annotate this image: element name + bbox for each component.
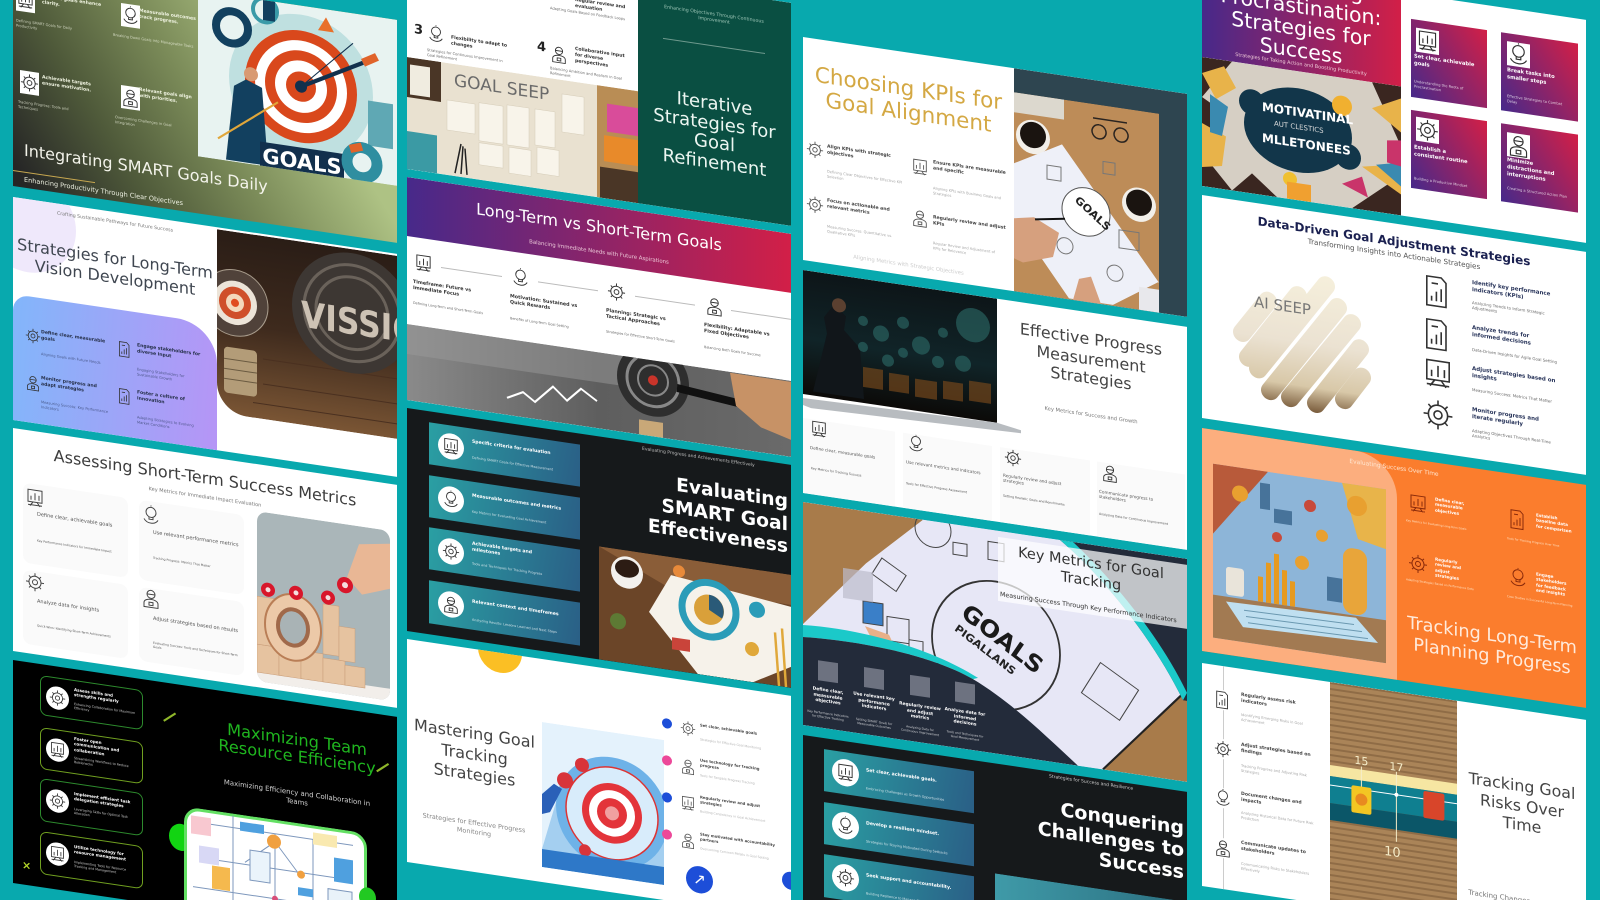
card: set goals <box>1411 19 1487 108</box>
card: review strategies: Setting Realistic Goals and Benchmarks <box>1003 494 1065 507</box>
item: assess risk: Regularly assess risk indicators <box>1241 693 1296 708</box>
item: measurable outcomes: Measurable outcomes track progress. <box>139 9 196 25</box>
item: review <box>913 210 1006 255</box>
item: review strategies: Regularly review and adjust strategies <box>1435 556 1461 581</box>
decorative lilac circle <box>0 169 76 279</box>
item: achievable targets: Achievable targets ensure motivation. <box>42 75 91 94</box>
header text: Evaluating Success Over Time <box>1349 459 1439 478</box>
slide: Tracking Long-Term Planning Progress <box>1202 428 1586 708</box>
timeline item: flexibility: Flexibility: Adaptable vs Fixed Objectives <box>704 323 770 341</box>
bar: measurable outcomes: Key Metrics for Evaluating Goal Achievement <box>472 510 546 525</box>
photo: target and hand <box>407 324 791 457</box>
timeline item: timeframe: Defining Long-Term and Short-Term Goals <box>413 301 483 315</box>
item: engage stakeholders <box>1507 566 1579 615</box>
photo: laptop with data spheres <box>803 270 1021 434</box>
item: engage stakeholders: Engaging Stakeholders for Sustainable Growth <box>137 367 184 381</box>
item 3 <box>414 22 507 63</box>
card: review strategies: Regularly review and adjust strategies <box>1003 473 1061 486</box>
timeline item: planning: Strategies for Effective Short-Term Goals <box>606 329 675 344</box>
list item 1: Set clear, achievable goals <box>700 722 757 736</box>
timeline rail <box>1223 666 1224 889</box>
card: define goals <box>803 418 895 507</box>
timeline item: timeframe: Timeframe: Future vs Immediate Focus <box>413 280 471 298</box>
item: adjust strategies <box>1214 738 1326 790</box>
bar: specific criteria: Defining SMART Goals for Effective Measurement <box>472 456 553 472</box>
bar: set goals: Set clear, achievable goals. <box>866 768 937 784</box>
card: relevant metrics: Tools for Effective Progress Assessment <box>906 481 967 494</box>
card: routine <box>1411 110 1487 199</box>
gradient panel <box>13 294 217 450</box>
item: adjust strategies: Adjust strategies based on findings <box>1241 743 1311 758</box>
item: review strategies <box>1406 551 1470 599</box>
photo: goals target illustration: GOALS <box>262 143 342 180</box>
item: specific goals: Defining SMART Goals for Daily Productivity <box>16 18 72 31</box>
item: measurable outcomes: Breaking Down Goals into Manageable Tasks <box>113 33 193 49</box>
item: identify KPIs: Identify key performance indicators (KPIs) <box>1472 280 1550 301</box>
accent dash <box>163 713 176 721</box>
photo: goal board <box>407 57 638 204</box>
bar: specific criteria <box>429 422 580 487</box>
card: minimize distractions: Creating a Structured Action Plan <box>1507 186 1567 199</box>
card: adjust strategies: Adjust strategies based on results <box>153 616 238 634</box>
bar: measurable outcomes <box>429 475 580 540</box>
card: analyze data: Analyze data for insights <box>37 599 99 614</box>
item: monitor progress: Measuring Success: Key Performance Indicators <box>41 400 108 414</box>
partial button <box>782 870 800 891</box>
item: document changes <box>1214 787 1326 839</box>
title: Conquering Challenges to Success <box>1038 799 1184 883</box>
subtitle: Strategies for Taking Action and Boosting Productivity <box>1235 52 1367 77</box>
title: Strategies for Long-Term Vision Development <box>17 235 213 299</box>
bar: seek support <box>824 854 974 900</box>
item: communicate updates: Communicating Risks to Stakeholders Effectively <box>1241 862 1309 876</box>
subtitle: Enhancing Productivity Through Clear Objectives <box>24 176 183 207</box>
bar: relevant context: Relevant context and timeframes <box>472 600 559 617</box>
card: adjust strategies: Evaluating Success: Tools and Techniques for Short-Term Goals <box>153 641 238 657</box>
subtitle: Key Metrics for Success and Growth <box>1044 406 1138 426</box>
photo: wooden blocks and pins <box>257 512 390 700</box>
item: engage stakeholders: Engage stakeholders for feedback and insights <box>1536 571 1567 597</box>
item: review strategies: Adapting Strategies Based on Performance Data <box>1406 577 1474 591</box>
item: engage stakeholders: Case Studies in Successful Long-Term Planning <box>1507 594 1572 608</box>
subtitle: Strategies for Effective Progress Monitoring <box>423 811 525 838</box>
item: monitor progress: Monitor progress and iterate regularly <box>1472 407 1539 428</box>
title: Assessing Short-Term Success Metrics <box>54 446 356 510</box>
item: ensure: Ensure KPIs are measurable and specific <box>933 160 1006 176</box>
list item 3: Building Consistency in Goal Achievement <box>700 809 765 823</box>
title: Maximizing Team Resource Efficiency <box>218 720 376 778</box>
list item 2: Tools for Tangible Progress Tracking <box>700 773 755 785</box>
card: define goals: Define clear, measurable goals <box>810 445 875 460</box>
target illustration <box>542 722 664 885</box>
card: set goals: Understanding the Roots of Procrastination <box>1414 79 1463 92</box>
bar: achievable targets: Achievable targets and milestones <box>472 542 532 557</box>
bar: specific criteria: Specific criteria for evaluation <box>472 440 551 456</box>
list item 2 <box>662 755 760 785</box>
item: performance indicators: Use relevant key performance indicators <box>853 691 895 713</box>
item 4: Balancing Ambition and Realism in Goal Refinement <box>550 66 622 81</box>
title: Evaluating SMART Goal Effectiveness <box>648 475 788 557</box>
item: monitor progress: Adapting Objectives Through Real-Time Analytics <box>1472 428 1551 445</box>
title: Mastering Goal Tracking Strategies <box>414 715 535 790</box>
item 3: Flexibility to adapt to changes <box>451 36 507 50</box>
list item 3: Regularly review and adjust strategies <box>700 794 760 808</box>
card: break tasks: Effective Strategies to Combat Delay <box>1507 94 1562 106</box>
accent cross: × <box>22 858 31 873</box>
card: communicate progress: Analyzing Data for Continuous Improvement <box>1099 512 1168 526</box>
photo: desk with data wall <box>1213 464 1386 663</box>
peach panel <box>1202 428 1397 680</box>
list item 1 <box>662 718 761 750</box>
item: define objectives <box>807 660 849 722</box>
item: assess risk: Identifying Emerging Risks in Goal Achievement <box>1241 713 1303 726</box>
teal swoosh and right shape <box>803 540 1187 766</box>
item: analyze data: Analyze data for informed decisions <box>945 707 985 728</box>
item: specific goals <box>16 0 101 31</box>
photo: motivational milestones table <box>1202 57 1401 216</box>
item: monitor progress <box>27 376 108 414</box>
slide: Integrating SMART Goals Daily <box>13 0 397 243</box>
item: define goals: Aligning Goals with Future Needs <box>41 352 101 365</box>
bar: measurable outcomes: Measurable outcomes and metrics <box>472 494 561 512</box>
card: assess skills <box>40 675 143 730</box>
item: engage stakeholders <box>119 341 200 381</box>
bar: resilient mindset: Develop a resilient mindset. <box>866 821 939 837</box>
photo: timeline on wood <box>1330 682 1457 900</box>
bar: achievable targets: Tools and Techniques for Tracking Progress <box>472 562 542 576</box>
item: assess risk <box>1214 689 1326 741</box>
card: relevant metrics: Use relevant metrics and indicators <box>906 459 981 475</box>
bar: resilient mindset: Strategies for Staying Motivated During Setbacks <box>866 839 948 855</box>
item: align: Align KPIs with strategic objectives <box>827 145 891 159</box>
item: review metrics: Analyzing Data for Continuous Improvement <box>901 724 939 737</box>
bar: set goals: Embracing Challenges as Growth Opportunities <box>866 786 944 802</box>
slide: Strategies for Long-Term Vision Development <box>13 197 397 477</box>
item: communicate updates <box>1214 837 1326 889</box>
photo: goals plan on desk <box>1014 92 1159 313</box>
card: adjust strategies <box>139 587 244 676</box>
subtitle: Transforming Insights into Actionable Strategies <box>1308 237 1480 271</box>
photo: notebook and coffee <box>599 546 791 688</box>
photo: goal board: GOAL SEEP <box>454 71 549 105</box>
photo: timeline on wood: 10 <box>1384 844 1400 861</box>
gradient header <box>407 177 791 293</box>
list item 3 <box>662 792 766 823</box>
slide: Assessing Short-Term Success Metrics <box>13 428 397 708</box>
list item 4: Overcoming Common Pitfalls in Goal Setting <box>700 846 769 861</box>
item: review: Regular Review and Adjustment of KPIs for Relevance <box>933 241 995 255</box>
slide: Data-Driven Goal Adjustment Strategies <box>1202 195 1586 475</box>
item: relevant goals <box>115 85 192 127</box>
card: delegation: Implement efficient task delegation strategies <box>74 791 130 809</box>
slide: Evaluating SMART Goal Effectiveness <box>407 408 791 688</box>
item: analyze trends: Analyze trends for informed decisions <box>1472 325 1531 347</box>
photo: vision light bulb <box>217 229 397 439</box>
slide: Tracking Goal Risks Over Time <box>1202 663 1586 900</box>
timeline item: flexibility <box>704 298 791 357</box>
card: delegation <box>40 778 143 836</box>
photo: timeline on wood: 15 <box>1354 754 1368 769</box>
title: Integrating SMART Goals Daily <box>24 141 268 196</box>
card: relevant metrics: Tracking Progress: Metrics That Matter <box>153 556 211 568</box>
footer text: Aligning Metrics with Strategic Objectives <box>853 254 964 277</box>
item 3: 3 <box>414 22 423 38</box>
arrow button: ↗ <box>693 869 706 889</box>
subtitle: Maximizing Efficiency and Collaboration in Teams <box>224 778 370 808</box>
slide: Choosing KPIs for Goal Alignment <box>803 37 1187 317</box>
item: define goals: Define clear, measurable goals <box>41 330 105 345</box>
card: set goals: Set clear, achievable goals <box>1414 53 1474 68</box>
item: identify KPIs <box>1422 273 1572 333</box>
item: ensure: Aligning KPIs with Business Goals and Strategies <box>933 186 1001 200</box>
timeline item: motivation: Benefits of Long-Term Goal Setting <box>510 316 569 329</box>
title: Choosing KPIs for Goal Alignment <box>815 63 1002 138</box>
item: monitor progress <box>1422 396 1572 456</box>
bar: resilient mindset <box>824 802 974 866</box>
flowchart image <box>184 808 367 900</box>
title: Data-Driven Goal Adjustment Strategies <box>1258 214 1530 269</box>
yellow half circle <box>478 626 522 676</box>
bar: set goals <box>824 749 974 813</box>
item: analyze data <box>944 682 986 742</box>
item: review: Regularly review and adjust KPIs <box>933 215 1006 231</box>
card: communicate progress <box>1097 462 1185 550</box>
item: achievable targets: Tracking Progress: Tools and Techniques <box>18 100 69 112</box>
card: routine: Establish a consistent routine <box>1414 144 1468 165</box>
card: analyze data: Quick Wins: Identifying Short-Term Achievements <box>37 624 111 638</box>
photo: goals target illustration <box>198 0 397 186</box>
bar: relevant context: Analyzing Results: Lessons Learned and Next Steps <box>472 618 557 634</box>
slide: Overcoming Procrastination <box>1202 0 1586 243</box>
card: relevant metrics <box>903 433 992 521</box>
title: Key Metrics for Goal Tracking <box>1018 545 1164 594</box>
subtitle: Key Metrics for Immediate Impact Evaluation <box>149 486 261 509</box>
item: adjust strategies: Measuring Success: Metrics That Matter <box>1472 387 1552 404</box>
title: Effective Progress Measurement Strategies <box>1020 319 1162 394</box>
slide: Long-Term vs Short-Term Goals <box>407 177 791 457</box>
slide: Iterative Strategies for Goal Refinement <box>407 0 791 226</box>
item: foster culture <box>119 388 194 429</box>
photo: motivational milestones table: MLLETONEES <box>1262 131 1351 158</box>
card: open communication <box>40 727 143 784</box>
card: assess skills: Enhancing Collaboration for Maximum Efficiency <box>74 702 135 715</box>
card: break tasks: Break tasks into smaller steps <box>1507 67 1555 86</box>
item 4 <box>537 39 625 81</box>
item: foster culture: Foster a culture of innovation <box>137 390 185 405</box>
item: document changes: Document changes and impacts <box>1241 792 1302 806</box>
item: adjust strategies: Tracking Progress and Adjusting Risk Strategies <box>1241 764 1307 778</box>
card: define goals: Key Performance Indicators for Immediate Impact <box>37 539 112 554</box>
card: relevant metrics <box>139 500 244 595</box>
slide: Mastering Goal Tracking Strategies <box>407 639 791 900</box>
photo: goals plan on desk: GOALS <box>1072 194 1113 233</box>
bar: achievable targets <box>429 527 580 592</box>
timeline item: motivation: Motivation: Sustained vs Quick Rewards <box>510 294 577 311</box>
subtitle: Balancing Immediate Needs with Future Aspirations <box>529 239 669 266</box>
card: define goals: Key Metrics for Tracking Success <box>811 466 861 478</box>
item: foster culture: Adapting Strategies to Evolving Market Conditions <box>137 415 194 429</box>
item: baseline data: Tools for Tracking Progress Over Time <box>1507 536 1559 548</box>
item: adjust strategies <box>1422 356 1572 416</box>
card: open communication: Foster open communication and collaboration <box>74 736 119 756</box>
slide: Effective Progress Measurement Strategies <box>803 270 1187 550</box>
panel rule <box>663 38 765 54</box>
card: minimize distractions <box>1501 123 1578 213</box>
item: focus: Measuring Success: Quantitative vs. Qualitative KPIs <box>827 225 892 238</box>
photo: timeline on wood: 17 <box>1389 760 1403 775</box>
card: assess skills: Assess skills and strengths regularly <box>74 687 119 704</box>
item: analyze data: Tools and Techniques for Goal Measurement <box>947 729 983 742</box>
green blob left <box>169 822 193 853</box>
item: measurable outcomes <box>113 3 196 49</box>
item: define objectives: Define clear, measurable objectives <box>1435 496 1464 516</box>
item 4: Collaborative input for diverse perspectives <box>575 47 625 69</box>
card: relevant metrics: Use relevant performance metrics <box>153 530 238 548</box>
note fragment: Adapting Goals Based on Feedback Loops <box>550 6 625 21</box>
list item 2: Use technology for tracking progress <box>700 757 760 771</box>
item 3: Strategies for Continuous Improvement in Goal Refinement <box>427 48 503 63</box>
item: define objectives: Define clear, measurable objectives <box>813 686 843 707</box>
timeline item: motivation <box>510 268 598 329</box>
arrow button <box>686 864 713 895</box>
title: Tracking Goal Risks Over Time <box>1469 768 1575 837</box>
list item 4 <box>662 829 775 861</box>
title: Long-Term vs Short-Term Goals <box>476 199 722 255</box>
item: analyze trends: Data-Driven Insights for Agile Goal Setting <box>1472 347 1557 365</box>
item: performance indicators <box>853 667 895 730</box>
item: communicate updates: Communicate updates to stakeholders <box>1241 841 1306 857</box>
title panel <box>998 537 1187 629</box>
photo: motivational milestones table: AUT CLESTICS <box>1274 119 1324 135</box>
timeline item: planning: Planning: Strategic vs Tactical Approaches <box>606 308 666 328</box>
green blob right <box>359 886 376 900</box>
photo: goals sketch and shapes <box>803 502 1187 782</box>
slide: Conquering Challenges to Success <box>803 735 1187 900</box>
panel subtitle: Enhancing Objectives Through Continuous Improvement <box>664 5 764 26</box>
card: open communication: Streamlining Workflows to Reduce Bottlenecks <box>74 756 129 768</box>
gold rule <box>13 170 95 183</box>
item: identify KPIs: Analyzing Trends to Inform Strategic Adjustments <box>1472 300 1545 316</box>
item: monitor progress: Monitor progress and adapt strategies <box>41 376 97 393</box>
title: Tracking Long-Term Planning Progress <box>1407 613 1577 679</box>
photo: goals sketch and shapes: PIGALLANS <box>952 622 1018 678</box>
accent dash right <box>376 763 389 772</box>
item: review metrics <box>899 674 941 737</box>
card: technology: Implementing Tools for Resource Tracking and Management <box>74 860 126 875</box>
card: define goals <box>23 482 128 578</box>
item: relevant goals: Overcoming Challenges in Goal Integration <box>115 115 172 127</box>
card: delegation: Leveraging Skills for Optimal Task Allocation <box>74 807 128 819</box>
card: minimize distractions: Minimize distractions and interruptions <box>1507 157 1555 182</box>
green side panel <box>638 0 791 226</box>
item 4: 4 <box>537 39 546 56</box>
card: technology: Utilize technology for resource management <box>74 844 126 862</box>
item: document changes: Analyzing Historical Data for Future Risk Prediction <box>1241 811 1313 825</box>
item: achievable targets <box>18 70 91 112</box>
item: define goals <box>26 328 105 365</box>
list item 4: Stay motivated with accountability partners <box>700 831 775 847</box>
slide: Maximizing Team Resource Efficiency <box>13 660 397 900</box>
item: analyze trends <box>1422 316 1572 376</box>
list item 1: Strategies for Effective Goal Monitoring <box>700 737 761 750</box>
item: define objectives: Key Performance Indicators for Effective Tracking <box>807 709 849 722</box>
card: review strategies <box>1000 447 1090 535</box>
card: routine: Building a Productive Mindset <box>1414 176 1467 188</box>
card: analyze data <box>23 569 128 659</box>
subtitle: Crafting Sustainable Pathways for Future Success <box>57 212 173 234</box>
photo: goals sketch and shapes: GOALS <box>957 599 1048 680</box>
photo: motivational milestones table: MOTIVATINAL <box>1262 100 1353 127</box>
item: align: Defining Clear Objectives for Effective KPI Selection <box>827 170 902 185</box>
item: review metrics: Regularly review and adjust metrics <box>899 701 941 722</box>
item: focus: Focus on actionable and relevant metrics <box>827 199 890 216</box>
small heading: Strategies for Success and Resilience <box>1049 774 1133 792</box>
card: technology <box>40 831 143 889</box>
card: communicate progress: Communicate progress to stakeholders <box>1099 489 1153 503</box>
striped photo shape: AI SEEP <box>1254 293 1311 319</box>
item: focus <box>806 196 892 238</box>
photo: teal scene <box>995 874 1174 900</box>
card: break tasks <box>1501 32 1578 122</box>
bar: seek support: Seek support and accountability. <box>866 873 951 891</box>
subtitle: Measuring Success Through Key Performance Indicators <box>1000 591 1177 624</box>
item: performance indicators: Setting SMART Goals for Measurable Outcomes <box>856 717 892 730</box>
small heading: Evaluating Progress and Achievements Effectively <box>642 447 755 468</box>
timeline item: planning <box>606 283 695 344</box>
gradient header <box>1202 0 1400 86</box>
item: align <box>806 142 902 185</box>
panel title: Iterative Strategies for Goal Refinement <box>653 88 776 181</box>
timeline item: flexibility: Balancing Both Goals for Success <box>704 345 761 357</box>
item: engage stakeholders: Engage stakeholders for diverse input <box>137 343 200 359</box>
item: relevant goals: Relevant goals align with priorities. <box>139 88 192 104</box>
timeline item: timeframe <box>413 254 502 315</box>
dark side panel <box>1014 68 1187 317</box>
item: baseline data <box>1507 506 1579 555</box>
bar: relevant context <box>429 580 580 646</box>
item: define objectives: Key Metrics for Evaluating Long-Term Goals <box>1406 518 1466 531</box>
slide: Key Metrics for Goal Tracking <box>803 502 1187 782</box>
striped photo shape <box>1222 248 1387 437</box>
item: adjust strategies: Adjust strategies based on insights <box>1472 366 1555 384</box>
item: define objectives <box>1406 490 1470 538</box>
item: baseline data: Establish baseline data for comparison <box>1536 512 1572 534</box>
card: define goals: Define clear, achievable goals <box>37 512 112 529</box>
item: ensure <box>913 158 1006 200</box>
